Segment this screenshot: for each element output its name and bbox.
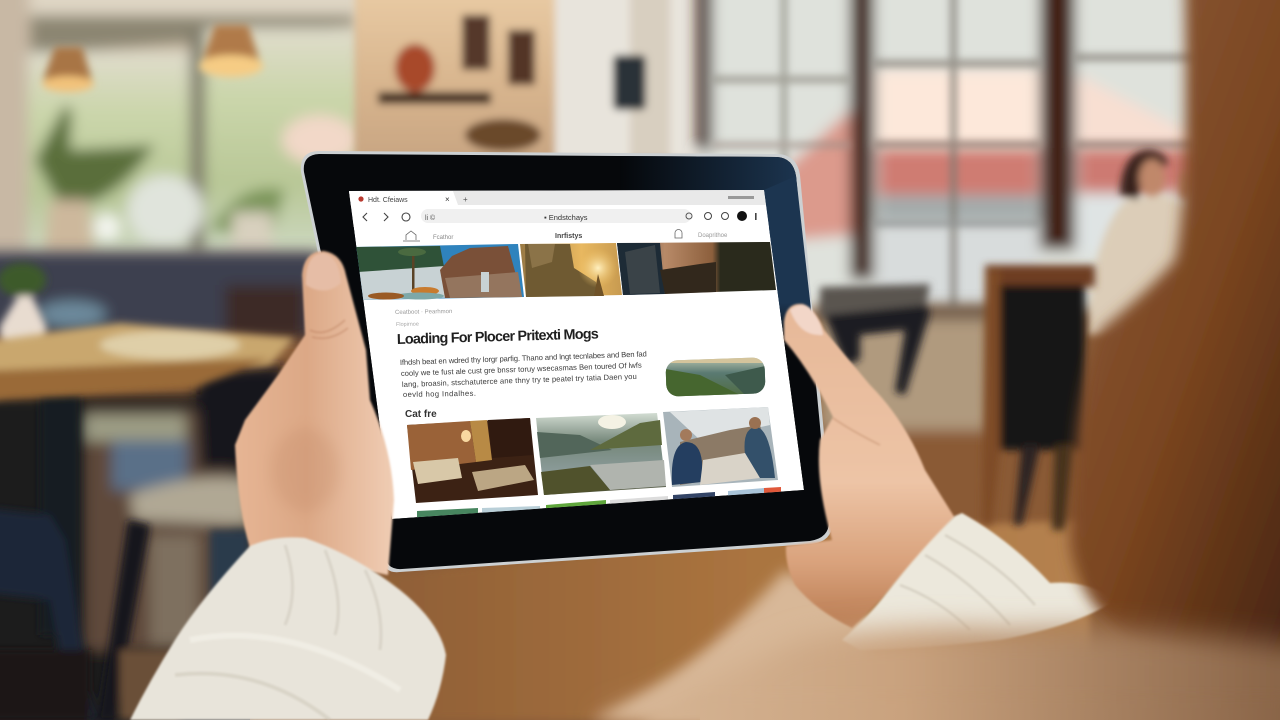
blouse shadow, behind the tablet and hand — [590, 570, 870, 720]
site navigation: Inrfistys — [555, 233, 582, 240]
browser chrome: Hdt. Cfeiaws — [368, 197, 408, 204]
browser chrome: li © — [425, 214, 436, 222]
thumbnail — [790, 305, 823, 335]
background table and dark chair — [820, 265, 1095, 530]
browser chrome: × — [445, 195, 450, 204]
right windows with awning — [697, 0, 1213, 310]
browser chrome — [340, 188, 780, 227]
chair frames — [0, 395, 250, 720]
bottom row thumbnails — [417, 487, 781, 518]
wooden table — [0, 323, 295, 405]
gallery: mountain lake — [536, 413, 666, 495]
site navigation: Doaprithoe — [698, 233, 728, 239]
small valley image — [666, 358, 766, 396]
hand shadow — [271, 428, 339, 512]
lower-left dark chairs — [0, 365, 285, 720]
browser chrome: + — [463, 195, 468, 204]
middle wall with frames and shelf — [355, 0, 715, 160]
person hair, blurred foreground right — [1070, 0, 1280, 690]
top image: palm beach and stone building — [355, 244, 524, 300]
gallery: warm interior — [407, 418, 538, 503]
window muntins — [712, 0, 1195, 310]
article paragraph: lang, broasin, stschatuterce ane thny try te peatel try tatia Daen you — [402, 372, 637, 389]
site navigation — [403, 230, 728, 241]
tablet — [301, 151, 832, 572]
pendant lamps — [42, 25, 263, 92]
article paragraph: oevld hog Indalhes. — [403, 389, 476, 399]
glass bezel — [304, 154, 829, 569]
floor — [380, 520, 1090, 720]
right hand holding tablet — [784, 304, 955, 628]
article breadcrumbs: Ceatboot · Pearhmon — [395, 309, 452, 316]
seated person in the background — [1088, 150, 1191, 335]
article paragraph: cooly we te fust ale cust gre bnssr toruy wsecasmas Ben toured Of lwfs — [401, 361, 642, 378]
right sweater cuff — [842, 513, 1115, 650]
bezel navy reflection — [620, 156, 800, 225]
person blouse, blurred foreground bottom — [595, 628, 1280, 720]
gallery: people at table — [663, 407, 778, 487]
thumbnail — [306, 253, 341, 291]
top image: golden sunset ruins — [520, 243, 622, 297]
left sweater cuff — [130, 537, 446, 720]
left window, ceiling and plants — [0, 0, 370, 270]
section heading: Cat fre — [405, 409, 437, 420]
screen: Flopirnoe — [396, 322, 419, 328]
article paragraph — [400, 349, 647, 399]
article heading: Loading For Plocer Pritexti Mogs — [397, 326, 599, 348]
left hand holding tablet — [235, 251, 394, 575]
small plant and vase — [0, 263, 46, 354]
top image: dusk castle — [617, 242, 776, 295]
right lower wall — [820, 305, 1080, 530]
article paragraph: Ifhdsh beat en wdred thy lorgr parfig. Thano and lngt tecnlabes and Ben fad — [400, 349, 647, 367]
browser chrome: ▪ Endstchays — [544, 213, 588, 222]
site navigation: Fcathor — [433, 235, 453, 241]
blue bench and wood chair — [0, 252, 320, 340]
tablet body — [301, 151, 832, 572]
screen — [340, 188, 804, 522]
